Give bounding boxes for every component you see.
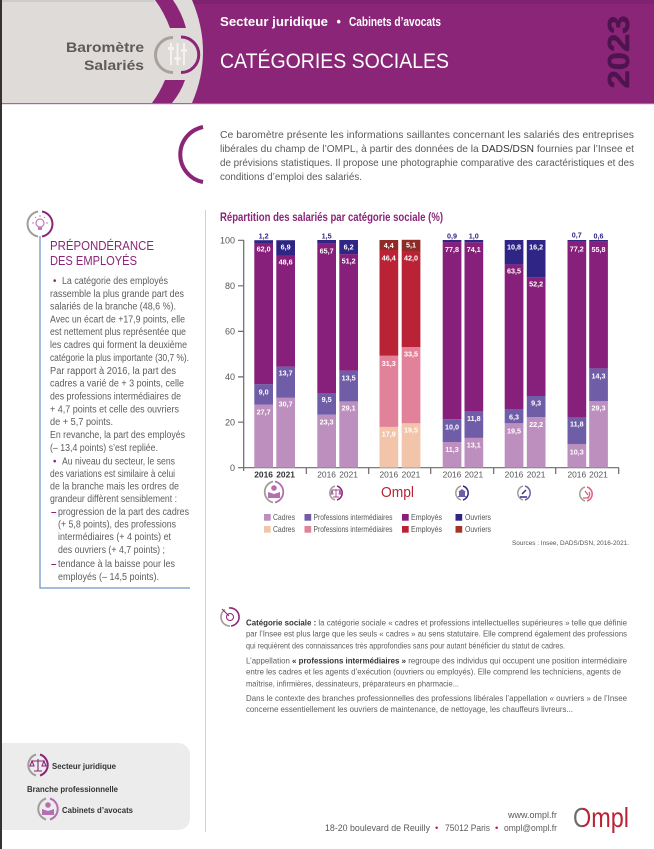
panel body text: Au niveau du secteur, le sens: [62, 456, 175, 468]
footer contact: •: [435, 823, 438, 834]
footer contact: •: [495, 823, 498, 834]
bars: group 5: [505, 240, 546, 480]
icon: reader: [38, 798, 58, 820]
bars: group 6: 10,3: [570, 447, 584, 456]
bars: cabinets d'avocats: 27,7: [257, 408, 271, 417]
intro text: de prévisions statistiques. Il propose une photographie comparative des caractéristiques et des: [220, 158, 634, 169]
panel body text: est nettement plus représentée que: [50, 327, 186, 338]
icon: group 5: [518, 486, 530, 500]
icon: sliders: [156, 37, 199, 72]
panel body text: salariés de la branche (48,6 %).: [50, 302, 176, 313]
footer contact: [325, 810, 557, 834]
bars: cabinets d'avocats: 30,7: [279, 400, 293, 409]
bars: cabinets d'avocats: 62,0: [257, 245, 271, 254]
chart title: Répartition des salariés par catégorie sociale (%): [220, 212, 443, 224]
bars: group 5: 16,2: [529, 242, 543, 251]
legend: Professions intermédiaires: [314, 513, 392, 522]
icon: intro arc: [180, 127, 203, 182]
chart axes: 80: [225, 281, 235, 291]
bars: group 6: 77,2: [570, 245, 584, 254]
bars: cabinets d'avocats: 48,6: [279, 258, 293, 267]
bars: group 6: 11,8: [570, 420, 584, 429]
bars: secteur juridique: 6,2: [344, 242, 354, 251]
barometer name: Baromètre: [66, 39, 144, 55]
bars: group 4: 2021: [464, 470, 483, 480]
chart axes: 40: [225, 372, 235, 382]
legend: Cadres: [273, 525, 295, 534]
header subtitle: [220, 15, 441, 29]
bars: group 5: 52,2: [529, 280, 543, 289]
bars: group 5: 2021: [527, 470, 546, 480]
bars: cabinets d'avocats: 2016: [254, 470, 273, 480]
panel heading: PRÉPONDÉRANCE: [50, 238, 154, 253]
year: 2023: [601, 16, 636, 88]
icon: scales: [28, 754, 48, 776]
icon: cabinets d'avocats: [265, 482, 283, 502]
bars: group 6: [567, 231, 608, 480]
panel body text: •: [53, 456, 57, 468]
bars: secteur juridique: 2021: [339, 470, 358, 480]
legend: Ouvriers: [465, 525, 491, 534]
bars: group 4: 11,3: [445, 445, 459, 454]
bars: cabinets d'avocats: 13,7: [279, 369, 293, 378]
legend: Professions intermédiaires: [314, 525, 392, 534]
legend: Cadres: [273, 513, 295, 522]
definitions text: concerne essentiellement les ouvriers de maintenance, de nettoyage, les chauffeurs livreurs...: [246, 704, 573, 714]
definitions text: entre les cadres et les agents d’exécution (ouvriers ou employés). Elle comprend les techniciens, agents de: [246, 666, 621, 676]
legend: Ouvriers: [465, 513, 491, 522]
bars: OMPL: [379, 240, 421, 480]
panel body text: intermédiaires (+ 4 points) et: [58, 532, 171, 543]
bars: secteur juridique: 2016: [317, 470, 336, 480]
bars: OMPL: 4,4: [384, 241, 394, 250]
barometer name: [66, 39, 144, 73]
panel body text: rassemble la plus grande part des: [50, 289, 184, 300]
chart axes: 20: [225, 417, 235, 427]
logo: Ompl footer: Ompl: [573, 802, 629, 833]
bars: secteur juridique: 9,5: [322, 395, 332, 404]
bars: group 4: 74,1: [467, 245, 481, 254]
bars: secteur juridique: 29,1: [342, 404, 356, 413]
bars: OMPL: 2016: [379, 470, 398, 480]
panel body text: des ouvriers (+ 4,7 points) ;: [58, 545, 165, 556]
header title: CATÉGORIES SOCIALES: [220, 50, 449, 73]
bars: group 6: 29,3: [592, 404, 606, 413]
chart axes: 100: [220, 236, 235, 246]
panel heading: DES EMPLOYÉS: [50, 253, 137, 268]
bars: secteur juridique: 65,7: [320, 246, 334, 255]
definitions text: [246, 618, 627, 714]
bars: OMPL: 33,5: [404, 350, 418, 359]
panel body text: La catégorie des employés: [62, 276, 168, 287]
bars: cabinets d'avocats: 6,9: [281, 242, 291, 251]
barometer name: Salariés: [84, 57, 144, 73]
header banner: [2, 0, 654, 104]
definitions text: maîtrise, infirmières, dessinateurs, préparateurs en pharmacie...: [246, 678, 459, 688]
bars: cabinets d'avocats: 9,0: [259, 387, 269, 396]
key label: cabinets: Cabinets d’avocats: [62, 805, 133, 815]
legend: [264, 513, 491, 534]
bars: OMPL: 19,5: [404, 426, 418, 435]
definitions text: Catégorie sociale : la catégorie sociale « cadres et professions intellectuelles supérieures » telle que définie: [246, 618, 627, 628]
bars: secteur juridique: [317, 231, 358, 480]
bars: group 6: 0,6: [594, 232, 604, 241]
intro text: conditions d’emploi des salariés.: [220, 172, 362, 183]
header subtitle: Secteur juridique: [220, 15, 328, 29]
footer contact: ompl@ompl.fr: [504, 823, 557, 834]
icon: group 4: [456, 486, 468, 500]
panel body text: (+ 5,8 points), des professions: [58, 520, 176, 530]
intro text: [220, 130, 634, 183]
panel body text: [50, 276, 189, 583]
panel body text: grandeur diffèrent sensiblement :: [50, 494, 177, 505]
sources note: Sources : Insee, DADS/DSN, 2016-2021.: [512, 540, 629, 547]
bars: group 6: 55,8: [592, 245, 606, 254]
panel body text: les cadres qui forment la deuxième: [50, 340, 187, 351]
footer contact: 18-20 boulevard de Reuilly: [325, 823, 430, 834]
chart axes: 60: [225, 327, 235, 337]
definitions text: Dans le contexte des branches professionnelles des professions libérales l’appellation « ouvriers » de l’Insee: [246, 693, 627, 703]
bars: OMPL: 17,9: [382, 430, 396, 439]
bars: secteur juridique: 13,5: [342, 374, 356, 383]
panel body text: + 4,7 points et celle des ouvriers: [50, 404, 179, 416]
header subtitle: •: [336, 15, 341, 29]
definitions text: qui requièrent des connaissances très approfondies sans pour autant bénéficier du statut de cadres.: [246, 640, 565, 650]
bars: group 6: 2021: [589, 470, 608, 480]
panel body text: Avec un écart de +17,9 points, elle: [50, 314, 185, 326]
bars: group 6: 2016: [567, 470, 586, 480]
panel body text: •: [53, 276, 57, 287]
bars: group 4: 10,0: [445, 422, 459, 431]
key label: secteur: Secteur juridique: [52, 761, 116, 771]
bars: secteur juridique: 1,5: [322, 231, 332, 240]
panel body text: –: [51, 507, 57, 518]
panel body text: des professions intermédiaires de: [50, 392, 181, 402]
panel body text: des variations est similaire à celui: [50, 469, 175, 480]
legend: Employés: [411, 525, 442, 534]
chart axes: [220, 236, 619, 474]
bars: cabinets d'avocats: 2021: [276, 470, 295, 480]
panel body text: progression de la part des cadres: [58, 507, 189, 518]
panel body text: de la branche mais les ordres de: [50, 482, 179, 492]
panel body text: –: [51, 559, 57, 570]
bars: group 5: 2016: [505, 470, 524, 480]
panel body text: cadres a varié de + 3 points, celle: [50, 378, 184, 390]
bars: group 5: 6,3: [509, 412, 519, 421]
icon: group 6: [580, 487, 592, 501]
legend: Employés: [411, 513, 442, 522]
bars: group 5: 19,5: [507, 426, 521, 435]
bars: group 5: 22,2: [529, 420, 543, 429]
bar chart: [220, 231, 619, 480]
footer contact: 75012 Paris: [445, 823, 490, 834]
bars: secteur juridique: 51,2: [342, 257, 356, 266]
panel: key box: [2, 743, 190, 830]
panel body text: (– 13,4 points) s’est repliée.: [50, 443, 158, 454]
bars: group 5: 9,3: [531, 398, 541, 407]
bars: group 4: 1,0: [469, 232, 479, 241]
bars: group 5: 10,8: [507, 242, 521, 251]
intro text: libérales du champ de l’OMPL, à partir des données de la DADS/DSN fournies par l’Insee et: [220, 144, 634, 155]
bars: group 4: 77,8: [445, 245, 459, 254]
bars: group 6: 0,7: [572, 231, 582, 240]
bars: group 4: 11,8: [467, 414, 481, 423]
bars: OMPL: 5,1: [406, 241, 416, 250]
intro text: Ce baromètre présente les informations saillantes concernant les salariés des entreprises: [220, 130, 634, 141]
panel heading: [50, 238, 154, 268]
bars: group 4: 0,9: [447, 232, 457, 241]
panel body text: tendance à la baisse pour les: [58, 559, 175, 570]
bars: OMPL: 31,3: [382, 359, 396, 368]
bars: OMPL: 42,0: [404, 253, 418, 262]
header subtitle: Cabinets d’avocats: [349, 15, 441, 29]
panel body text: employés (– 14,5 points).: [58, 572, 159, 583]
icon: secteur juridique: [330, 486, 342, 500]
chart axes: 0: [230, 463, 235, 473]
panel body text: de + 5,7 points.: [50, 417, 113, 428]
panel body text: En revanche, la part des employés: [50, 430, 185, 441]
bars: group 4: 13,1: [467, 441, 481, 450]
bars: group 6: 14,3: [592, 372, 606, 381]
bars: group 4: [443, 232, 483, 480]
icon: target: [221, 608, 239, 626]
bars: OMPL: 2021: [402, 470, 421, 480]
definitions text: L’appellation « professions intermédiaires » regroupe des individus qui occupent une position intermédiaire: [246, 656, 627, 666]
bars: cabinets d'avocats: [254, 231, 295, 480]
panel body text: Par rapport à 2016, la part des: [50, 366, 176, 377]
panel: prépondérance des employés: [28, 212, 190, 588]
bars: group 5: 63,5: [507, 267, 521, 276]
footer contact: www.ompl.fr: [507, 810, 557, 821]
bars: OMPL: 46,4: [382, 253, 396, 262]
key label: branche: Branche professionnelle: [27, 784, 118, 794]
panel body text: catégorie la plus importante (30,7 %).: [50, 353, 189, 364]
bars: secteur juridique: 23,3: [320, 417, 334, 426]
logo: Ompl chart: Ompl: [381, 484, 414, 501]
bars: cabinets d'avocats: 1,2: [259, 231, 269, 240]
icon: light bulb: [28, 212, 52, 236]
bars: group 4: 2016: [443, 470, 462, 480]
